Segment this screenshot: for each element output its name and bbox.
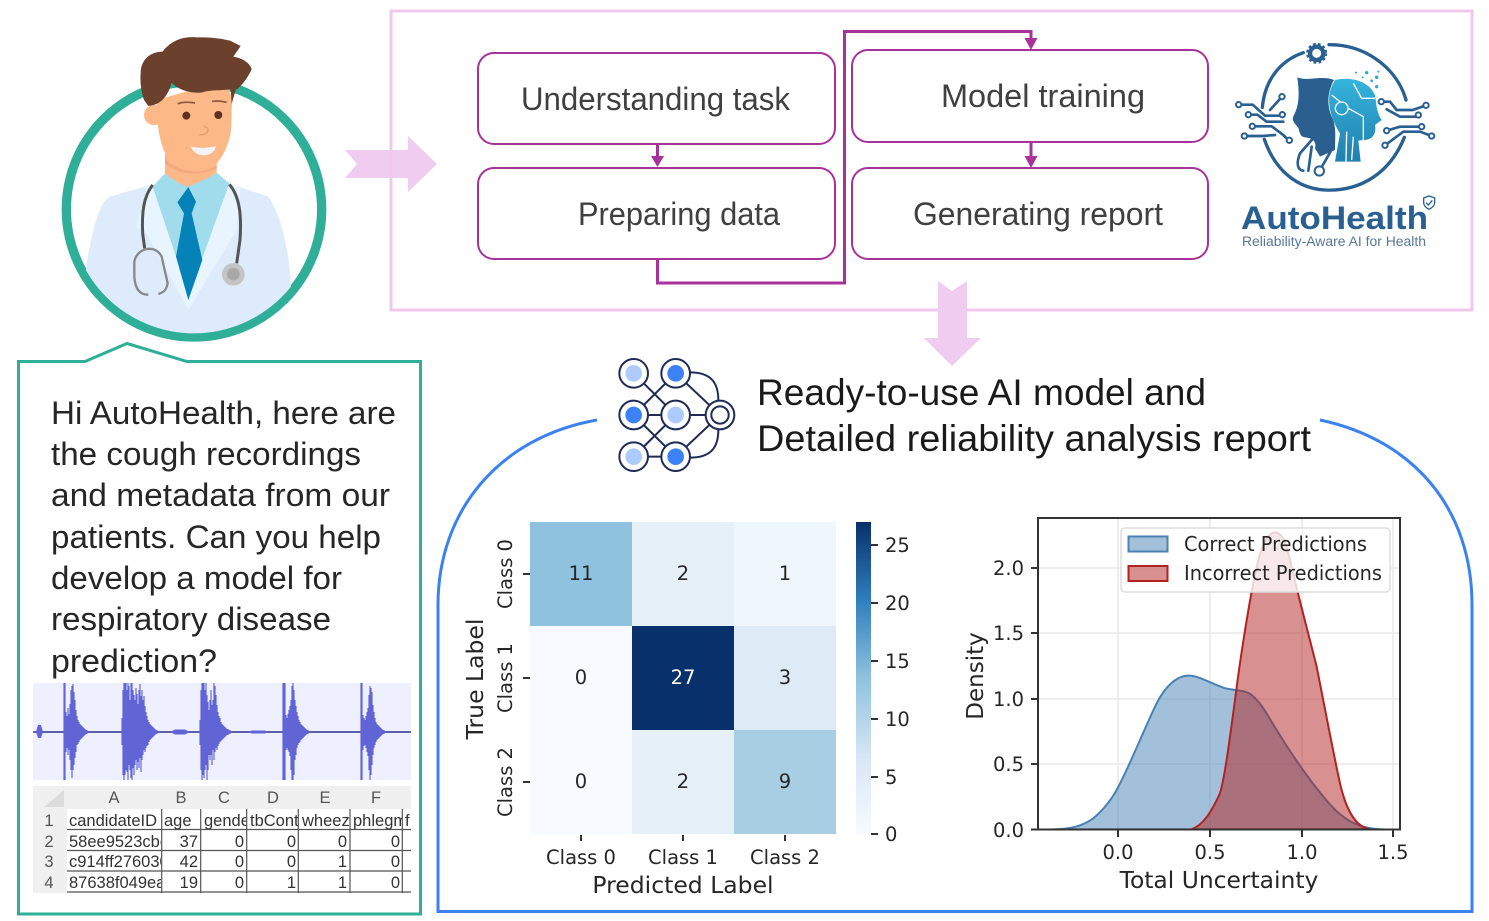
chart: confusion matrix xyxy=(461,522,836,899)
patient metadata spreadsheet: wheezing xyxy=(301,812,372,830)
patient metadata spreadsheet: candidateID xyxy=(69,812,157,830)
icon: logo emblem xyxy=(1236,44,1435,209)
patient metadata spreadsheet: 42 xyxy=(180,853,198,871)
arrow: workflow to outputs xyxy=(924,281,981,366)
chart: confusion matrix: Class 2 xyxy=(750,846,820,869)
step: understanding task xyxy=(478,53,835,144)
chart: uncertainty density: 0.0 xyxy=(1102,841,1134,864)
chart: uncertainty density: 1.5 xyxy=(1377,841,1409,864)
patient metadata spreadsheet: 19 xyxy=(180,874,198,892)
chart: confusion matrix: 3 xyxy=(779,666,791,689)
panel: patient request speech bubble xyxy=(18,344,420,914)
chart: colour bar: 15 xyxy=(885,650,910,673)
patient metadata spreadsheet: 1 xyxy=(338,853,347,871)
chart: uncertainty density: 1.0 xyxy=(993,688,1024,711)
chart: confusion matrix: 11 xyxy=(569,562,593,585)
step: preparing data: Preparing data xyxy=(578,196,780,232)
chart: colour bar: 10 xyxy=(885,708,910,731)
patient metadata spreadsheet: c914ff2760300 xyxy=(69,853,178,871)
chart legend: Incorrect Predictions xyxy=(1184,561,1382,585)
patient metadata spreadsheet: E xyxy=(319,789,331,807)
logo wordmark: AutoHealth xyxy=(1241,200,1428,236)
chart: confusion matrix: 1 xyxy=(779,562,791,585)
patient metadata spreadsheet: 0 xyxy=(287,833,296,851)
chart: uncertainty density xyxy=(963,518,1409,894)
step: model training: Model training xyxy=(941,78,1145,114)
request text: Hi AutoHealth, here are xyxy=(51,395,396,431)
request text: respiratory disease xyxy=(51,601,331,637)
patient metadata spreadsheet: 0 xyxy=(235,833,244,851)
patient metadata spreadsheet: 58ee9523cbc0 xyxy=(69,833,177,851)
heading: outputs: Detailed reliability analysis report xyxy=(757,418,1312,459)
panel: AutoHealth workflow xyxy=(391,11,1472,310)
patient metadata spreadsheet: 4 xyxy=(44,874,54,892)
chart: confusion matrix: True Label xyxy=(461,619,489,740)
request text: and metadata from our xyxy=(51,477,390,513)
logo tagline: Reliability-Aware AI for Health xyxy=(1242,234,1426,249)
panel: outputs frame xyxy=(438,420,1472,912)
icon: neural network xyxy=(619,359,734,471)
patient metadata spreadsheet: 0 xyxy=(235,853,244,871)
chart: confusion matrix: 0 xyxy=(575,666,587,689)
density curve: correct predictions xyxy=(1053,676,1383,829)
chart: confusion matrix: Predicted Label xyxy=(592,871,774,899)
request text: prediction? xyxy=(51,643,217,679)
patient metadata spreadsheet: A xyxy=(108,789,120,807)
patient metadata spreadsheet: 0 xyxy=(235,874,244,892)
chart: confusion matrix: 2 xyxy=(677,562,689,585)
step: understanding task: Understanding task xyxy=(521,81,791,117)
chart: confusion matrix: Class 0 xyxy=(546,846,616,869)
request text: patients. Can you help xyxy=(51,519,381,555)
chart: uncertainty density: 1.5 xyxy=(993,622,1024,645)
chart: colour bar: 25 xyxy=(885,534,910,557)
patient metadata spreadsheet: 1 xyxy=(44,812,54,830)
patient metadata spreadsheet: B xyxy=(175,789,187,807)
patient metadata spreadsheet: 1 xyxy=(287,874,296,892)
step: generating report: Generating report xyxy=(913,196,1163,232)
request text xyxy=(51,395,396,679)
chart: confusion matrix: Class 0 xyxy=(494,539,517,609)
doctor avatar xyxy=(66,37,322,337)
arrow: doctor to workflow xyxy=(345,136,437,192)
arrow: training to report xyxy=(1024,142,1038,168)
patient metadata spreadsheet: D xyxy=(267,789,279,807)
step: preparing data xyxy=(478,168,835,259)
heading: outputs: Ready-to-use AI model and xyxy=(757,372,1206,413)
patient metadata spreadsheet: phlegm xyxy=(353,812,407,830)
chart: uncertainty density: Density xyxy=(963,632,989,720)
patient metadata spreadsheet: 87638f049ea1 xyxy=(69,874,175,892)
chart: colour bar: 5 xyxy=(885,766,897,789)
step: model training xyxy=(852,50,1208,142)
patient metadata spreadsheet xyxy=(33,786,411,893)
chart: uncertainty density: 1.0 xyxy=(1286,841,1318,864)
patient metadata spreadsheet: age xyxy=(164,812,192,830)
chart: uncertainty density: 0.5 xyxy=(993,753,1024,776)
patient metadata spreadsheet: 0 xyxy=(391,833,400,851)
patient metadata spreadsheet: 0 xyxy=(287,853,296,871)
chart: confusion matrix: Class 2 xyxy=(494,747,517,817)
cough audio waveform xyxy=(33,683,411,780)
patient metadata spreadsheet: tbContact xyxy=(250,812,321,830)
chart legend: Correct Predictions xyxy=(1184,532,1367,556)
chart legend xyxy=(1121,528,1390,592)
chart: confusion matrix: Class 1 xyxy=(494,643,517,713)
chart: uncertainty density: Total Uncertainty xyxy=(1119,866,1319,894)
patient metadata spreadsheet: 0 xyxy=(338,833,347,851)
request text: the cough recordings xyxy=(51,436,361,472)
chart: uncertainty density: 0.0 xyxy=(993,819,1024,842)
chart: confusion matrix: 2 xyxy=(677,770,689,793)
patient metadata spreadsheet: f xyxy=(405,812,410,830)
chart: colour bar xyxy=(856,522,910,846)
patient metadata spreadsheet: 0 xyxy=(391,853,400,871)
patient metadata spreadsheet: 2 xyxy=(44,833,54,851)
heading: outputs xyxy=(757,372,1312,459)
chart: confusion matrix: 27 xyxy=(671,666,695,689)
patient metadata spreadsheet: F xyxy=(371,789,381,807)
AutoHealth logo xyxy=(1236,44,1435,249)
chart: confusion matrix: 0 xyxy=(575,770,587,793)
chart: uncertainty density: 2.0 xyxy=(993,557,1024,580)
patient metadata spreadsheet: 37 xyxy=(180,833,198,851)
chart: uncertainty density: 0.5 xyxy=(1194,841,1226,864)
step: generating report xyxy=(852,168,1208,259)
arrow: understanding to preparing xyxy=(651,144,664,167)
chart: colour bar: 0 xyxy=(885,823,897,846)
patient metadata spreadsheet: C xyxy=(218,789,230,807)
chart: confusion matrix: 9 xyxy=(779,770,791,793)
arrow: preparing to model training xyxy=(658,32,1038,283)
density curve: incorrect predictions xyxy=(1192,532,1370,829)
chart: colour bar: 20 xyxy=(885,592,910,615)
patient metadata spreadsheet: 3 xyxy=(44,853,54,871)
patient metadata spreadsheet: 0 xyxy=(391,874,400,892)
request text: develop a model for xyxy=(51,560,342,596)
chart: confusion matrix: Class 1 xyxy=(648,846,718,869)
patient metadata spreadsheet: gender xyxy=(204,812,256,830)
patient metadata spreadsheet: 1 xyxy=(338,874,347,892)
